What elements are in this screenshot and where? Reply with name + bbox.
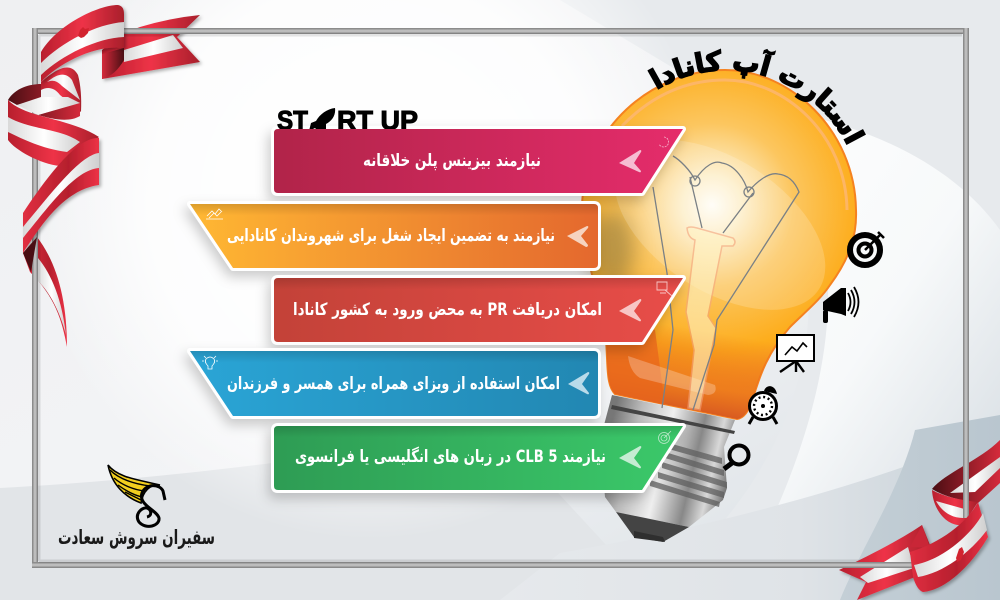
panel: PR on arrival xyxy=(274,278,683,342)
arrow xyxy=(619,150,641,172)
text: امکان استفاده از ویزای همراه برای همسر و فرزندان xyxy=(227,374,560,394)
ribbon tail xyxy=(839,525,930,600)
arrow xyxy=(567,226,588,247)
ribbon back curl xyxy=(41,67,81,112)
ribbon fold near tail xyxy=(102,48,124,79)
panel: CLB 5 language xyxy=(274,426,683,490)
ribbon curl front xyxy=(932,490,978,525)
maple leaf xyxy=(956,547,964,562)
text: نیازمند به تضمین ایجاد شغل برای شهروندان کانادایی xyxy=(227,226,555,246)
ribbon dark wedge xyxy=(23,237,37,272)
ribbon upper stripe xyxy=(950,457,1000,493)
bulb left tint xyxy=(603,300,665,405)
ribbon curl stripe xyxy=(936,501,968,518)
ribbon top stripe xyxy=(41,22,124,75)
bulb metal base xyxy=(600,395,735,542)
maple leaf xyxy=(78,27,89,38)
arrow xyxy=(568,372,589,394)
ribbon curl stripe xyxy=(47,75,80,100)
bulb lower highlight xyxy=(628,356,716,395)
bulb glass xyxy=(582,70,856,419)
text: امکان دریافت PR به محض ورود به کشور کانادا xyxy=(293,300,602,320)
bulb shadow side xyxy=(590,210,634,290)
ribbon tail stripe xyxy=(860,547,914,583)
logo wing xyxy=(108,465,160,503)
ribbon diagonal stripe xyxy=(23,153,99,238)
icon: alarm clock xyxy=(749,386,777,424)
card fill xyxy=(274,129,683,193)
icon: small target xyxy=(658,431,671,444)
heading: START UP with rocket: ST xyxy=(277,106,308,136)
logo swan neck xyxy=(137,486,165,526)
filament wires xyxy=(653,156,799,410)
icon: monitor xyxy=(657,282,672,296)
ribbon loop stripe xyxy=(17,97,80,115)
horizontal frame over tail xyxy=(830,562,915,568)
icon: chart board xyxy=(777,335,814,372)
icons around bulb xyxy=(724,232,884,469)
vertical frame over curl xyxy=(963,430,969,518)
ribbon inner loop xyxy=(8,84,80,120)
bulb lower tint xyxy=(600,290,800,419)
bulb highlight xyxy=(585,105,855,345)
icon: light bulb small xyxy=(202,356,218,369)
panel: job guarantee xyxy=(190,204,598,268)
ribbon: back tails behind frame xyxy=(23,15,200,347)
ribbon top band xyxy=(41,5,124,82)
ribbon diagonal band xyxy=(23,138,99,253)
text: نیازمند بیزینس پلن خلاقانه xyxy=(363,151,541,171)
ribbon: top left xyxy=(8,5,124,272)
icon: magnifier xyxy=(724,446,748,469)
arrow xyxy=(619,299,641,321)
ribbon loop front stripe xyxy=(8,117,80,152)
ribbon main stripe xyxy=(914,513,987,577)
bulb inner rim xyxy=(622,80,847,210)
panel: creative business plan xyxy=(274,106,683,193)
logo feathers xyxy=(110,470,150,500)
ribbon loop front xyxy=(8,100,99,166)
heading: START UP with rocket xyxy=(277,106,418,136)
ribbon: bottom right xyxy=(830,430,1000,600)
icon: spiral xyxy=(659,137,669,147)
icon: target xyxy=(850,232,884,265)
heading: curved Persian title: استارت آپ کانادا xyxy=(647,48,866,145)
light bulb xyxy=(582,70,856,542)
text: نیازمند CLB 5 در زبان های انگلیسی یا فرانسوی xyxy=(295,446,606,467)
ribbon main band xyxy=(910,502,988,592)
ribbon fold xyxy=(910,525,930,548)
logo name: سفیران سروش سعادت xyxy=(58,525,215,549)
icon: line chart xyxy=(206,209,223,219)
heading: START UP with rocket: RT UP xyxy=(337,106,418,136)
glass stem xyxy=(686,227,735,410)
ribbon upper band xyxy=(932,440,1000,503)
icon: rocket xyxy=(309,108,335,131)
icon: megaphone xyxy=(823,287,858,323)
logo xyxy=(58,465,215,549)
panel: companion visa xyxy=(190,351,598,416)
arrow xyxy=(619,446,641,468)
